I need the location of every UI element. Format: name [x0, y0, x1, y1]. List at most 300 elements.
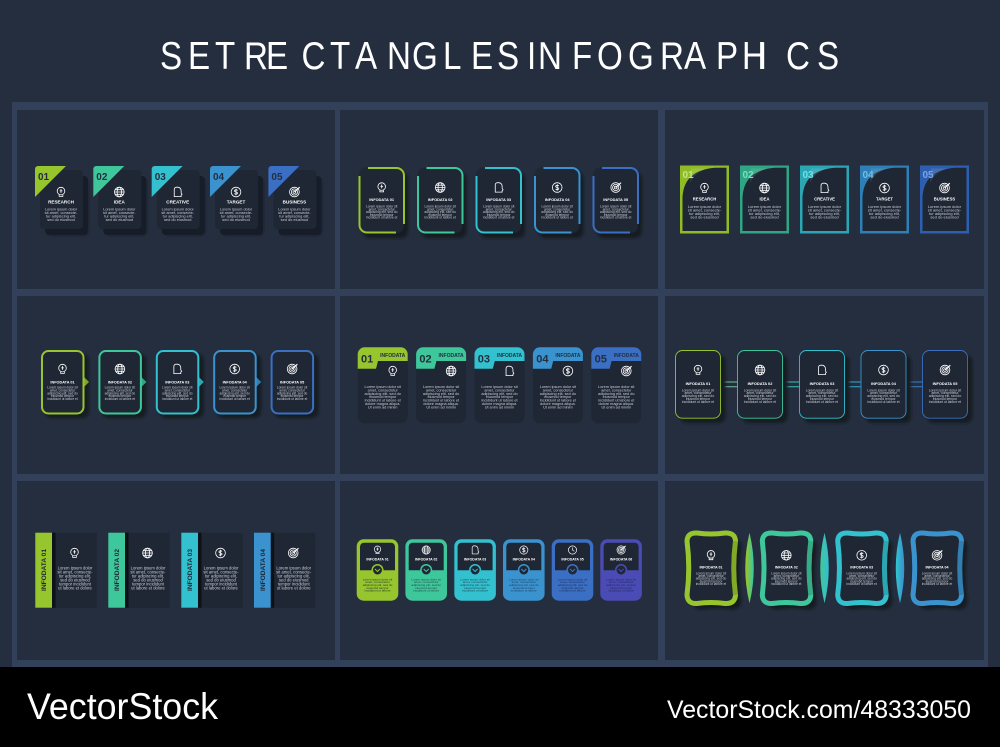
card infodata 03: eiusmod tempor: [850, 579, 874, 583]
card infodata 05: eiusmod tempor: [561, 586, 584, 590]
card infodata 02: Lorem ipsum dolor sit: [424, 204, 456, 208]
card infodata 05: amet, consectetur: [603, 207, 630, 211]
card infodata 02: sed do eiusmod: [133, 577, 163, 582]
card 04: adipiscing elit, sed do: [540, 392, 576, 396]
title: SET RECTANGLES INFOGRAPHICS: [160, 33, 839, 78]
card 03 creative: [152, 166, 205, 235]
card infodata 04: sit amet, consecte-: [276, 569, 312, 574]
card infodata 04: INFODATA 04: [260, 549, 267, 591]
card infodata 03: eiusmod tempor: [487, 213, 511, 217]
card 05 business: sed do eiusmod: [930, 215, 959, 220]
card infodata 03: amet, consectetur: [165, 388, 191, 392]
card infodata 03: eiusmod tempor: [810, 397, 835, 401]
card infodata 02: amet, consectetur: [747, 391, 774, 395]
card 02: adipiscing elit, sed do: [423, 392, 459, 396]
card infodata 05: [272, 351, 319, 418]
card infodata 05: Lorem ipsum dolor sit: [277, 386, 307, 390]
card infodata 05: INFODATA 05: [933, 381, 958, 386]
connector 4: [906, 382, 922, 387]
card 05 business: tur adipiscing elit,: [929, 211, 960, 216]
card infodata 01: INFODATA 01: [50, 380, 75, 384]
lens divider 2: [820, 533, 829, 603]
card infodata 02: sit amet, consecte-: [130, 569, 166, 574]
card 04 target: sit amet, consecte-: [868, 208, 902, 212]
card 02 idea: sed do eiusmod: [750, 215, 779, 220]
card infodata 05: Lorem ipsum dolor sit: [929, 388, 961, 392]
card 05: 05: [595, 354, 607, 366]
card infodata 04: INFODATA 04: [871, 381, 897, 386]
card infodata 04: ut labore et dolore: [277, 585, 311, 590]
footer image id: VectorStock.com/48333050: [667, 696, 971, 724]
card infodata 02: INFODATA 02: [748, 381, 773, 386]
card infodata 02: Lorem ipsum dolor: [131, 565, 166, 570]
card infodata 01: amet, consectetur: [698, 574, 725, 578]
card 01 research: Lorem ipsum dolor: [45, 206, 78, 212]
card infodata 01: adipiscing elit, sed do: [366, 210, 398, 214]
card infodata 01: amet, consectetur: [685, 391, 712, 395]
card infodata 05: INFODATA 05: [280, 380, 304, 384]
card infodata 01: amet, consectetur: [365, 580, 390, 584]
card infodata 05: adipiscing elit, sed do: [929, 394, 961, 398]
card infodata 05: Lorem ipsum dolor sit: [558, 577, 587, 581]
card 04: amet, consectetur: [543, 388, 574, 392]
card infodata 02: adipiscing elit, sed do: [411, 583, 441, 587]
card infodata 01: [42, 351, 89, 418]
card infodata 02: Lorem ipsum dolor sit: [105, 386, 135, 390]
card infodata 05: amet, consectetur: [932, 391, 959, 395]
card infodata 02: INFODATA 02: [428, 197, 453, 202]
card infodata 04: incididunt ut labore et: [220, 397, 250, 401]
card 05: incididunt ut labore et: [598, 399, 635, 403]
card infodata 05: eiusmod tempor: [604, 213, 628, 217]
card 04: dolore magna aliqua.: [540, 402, 576, 406]
card infodata 01: [35, 533, 97, 608]
panel: connected thin outline cards: [665, 296, 984, 474]
card 02 idea: sit amet, consecte-: [103, 210, 136, 215]
card infodata 03: sed do eiusmod: [206, 577, 236, 582]
card infodata 01: incididunt ut labore et: [696, 582, 726, 586]
card infodata 01: Lorem ipsum dolor sit: [363, 577, 392, 581]
card 04 target: tur adipiscing elit,: [221, 214, 251, 219]
card 04 target: sit amet, consecte-: [220, 210, 253, 215]
card infodata 06: INFODATA 06: [610, 558, 632, 562]
card 02 idea: tur adipiscing elit,: [104, 214, 134, 219]
card infodata 01: tempor incididunt: [59, 581, 92, 586]
card 03: adipiscing elit, sed do: [481, 392, 518, 396]
card infodata 03: amet, consectetur: [849, 574, 875, 578]
connector 1: [721, 382, 737, 387]
card infodata 03: Lorem ipsum dolor sit: [162, 386, 193, 390]
card infodata 04: amet, consectetur: [544, 207, 571, 211]
card infodata 04: [214, 351, 261, 418]
card infodata 01: INFODATA 01: [700, 566, 722, 570]
card infodata 02: eiusmod tempor: [748, 397, 773, 401]
card 05 business: 05: [922, 170, 934, 181]
card infodata 03: incididunt ut labore et: [162, 397, 193, 401]
card infodata 04: INFODATA 04: [513, 558, 535, 562]
card infodata 04: amet, consectetur: [512, 580, 536, 584]
card 04: eiusmod tempor: [544, 395, 572, 399]
card 03: dolore magna aliqua.: [482, 402, 517, 406]
card infodata 03: sit amet, consecte-: [203, 569, 239, 574]
card infodata 01: tur adipiscing elit,: [59, 573, 91, 578]
card infodata 02: amet, consectetur: [774, 574, 800, 578]
card infodata 03: incididunt ut labore: [462, 588, 488, 592]
card infodata 02: adipiscing elit, sed do: [105, 391, 135, 395]
card 01 research: sed do eiusmod: [690, 215, 719, 220]
card infodata 03: INFODATA 03: [810, 381, 835, 386]
card infodata 01: [687, 533, 742, 610]
panel: square frame cards with curved corner: [665, 110, 984, 289]
card infodata 04: [534, 168, 584, 238]
card infodata 06: incididunt ut labore: [608, 588, 634, 592]
card 02 idea: [93, 166, 146, 235]
card infodata 02: adipiscing elit, sed do: [744, 394, 776, 398]
card infodata 04: tempor incididunt: [278, 581, 310, 586]
card 01: eiusmod tempor: [369, 395, 397, 399]
card infodata 03: INFODATA 03: [850, 566, 873, 570]
card 03 creative: Lorem ipsum dolor: [162, 206, 195, 212]
card infodata 04: incididunt ut labore: [511, 588, 537, 592]
card 02 idea: Lorem ipsum dolor: [748, 204, 782, 209]
card infodata 03: INFODATA 03: [464, 558, 486, 562]
connector 3: [844, 382, 861, 387]
card infodata 02: incididunt ut labore et: [771, 582, 802, 586]
card 02 idea: sed do eiusmod: [106, 217, 133, 222]
card infodata 01: Lorem ipsum dolor sit: [682, 388, 714, 392]
card infodata 05: Lorem ipsum dolor sit: [600, 204, 632, 208]
card infodata 01: Lorem ipsum dolor sit: [696, 571, 726, 575]
card 03 creative: 03: [155, 172, 166, 183]
card 01: incididunt ut labore et: [365, 399, 402, 403]
card 01: INFODATA: [380, 353, 406, 359]
lens divider 3: [896, 533, 904, 603]
card infodata 04: eiusmod tempor: [871, 397, 897, 401]
card infodata 03: Lorem ipsum dolor sit: [460, 577, 490, 581]
card 02: 02: [419, 354, 432, 366]
panel: wavy outline cards with lens dividers: [665, 481, 984, 660]
card infodata 01: Lorem ipsum dolor sit: [47, 386, 78, 390]
card infodata 01: INFODATA 01: [369, 197, 395, 202]
card 03 creative: CREATIVE: [166, 200, 189, 205]
card infodata 03: [181, 533, 243, 608]
card 03 creative: sed do eiusmod: [164, 217, 191, 222]
card infodata 02: incididunt ut labore et: [744, 400, 776, 404]
card infodata 04: adipiscing elit, sed do: [509, 583, 539, 587]
card 01: [358, 347, 408, 423]
card 04 target: [210, 166, 263, 235]
card infodata 02: Lorem ipsum dolor sit: [411, 577, 441, 581]
card infodata 03: tempor incididunt: [205, 581, 238, 586]
card 03: [474, 347, 524, 423]
panel: vertical bar cards: [17, 481, 335, 660]
card infodata 04: incididunt ut labore et: [542, 216, 573, 220]
card 02 idea: 02: [96, 172, 108, 183]
card infodata 02: amet, consectetur: [414, 580, 438, 584]
card 04: Ut enim ad minim: [543, 405, 573, 409]
card infodata 05: eiusmod tempor: [933, 397, 958, 401]
card 01 research: RESEARCH: [693, 196, 716, 202]
card infodata 04: [503, 539, 545, 601]
card infodata 03: amet, consectetur: [463, 580, 487, 584]
card 01 research: 01: [38, 172, 50, 183]
card 03 creative: 03: [802, 170, 814, 181]
card 03: Lorem ipsum dolor sit: [481, 385, 519, 389]
card infodata 03: eiusmod tempor: [464, 586, 486, 590]
card infodata 03: adipiscing elit, sed do: [846, 577, 877, 581]
card infodata 04: adipiscing elit, sed do: [219, 391, 250, 395]
card infodata 02: eiusmod tempor: [775, 579, 799, 583]
card infodata 01: [676, 350, 726, 423]
card 01 research: tur adipiscing elit,: [689, 211, 720, 216]
card infodata 01: [359, 168, 408, 238]
card 03 creative: sed do eiusmod: [810, 215, 839, 220]
card infodata 04: eiusmod tempor: [545, 213, 570, 217]
card infodata 02: [762, 533, 817, 610]
card infodata 01: Lorem ipsum dolor: [58, 565, 93, 570]
card 05 business: sit amet, consecte-: [928, 208, 962, 212]
card infodata 02: eiusmod tempor: [108, 394, 132, 398]
card infodata 01: adipiscing elit, sed do: [363, 583, 393, 587]
card infodata 05: adipiscing elit, sed do: [277, 391, 308, 395]
card infodata 02: incididunt ut labore et: [105, 397, 135, 401]
card infodata 05: eiusmod tempor: [281, 394, 304, 398]
card infodata 01: eiusmod tempor: [51, 394, 75, 398]
card 04 target: [860, 166, 909, 234]
card infodata 05: incididunt ut labore et: [600, 216, 631, 220]
card infodata 01: amet, consectetur: [369, 207, 396, 211]
card 01 research: Lorem ipsum dolor: [688, 204, 722, 209]
card infodata 05: incididunt ut labore et: [277, 397, 307, 401]
card infodata 01: [357, 539, 398, 601]
card infodata 04: [254, 533, 315, 608]
card 05: Lorem ipsum dolor sit: [598, 385, 635, 389]
card infodata 06: amet, consectetur: [609, 580, 633, 584]
card 02: eiusmod tempor: [427, 395, 455, 399]
card infodata 04: Lorem ipsum dolor sit: [867, 388, 900, 392]
card 05 business: [268, 166, 321, 235]
card infodata 06: Lorem ipsum dolor sit: [606, 577, 636, 581]
card 01: Lorem ipsum dolor sit: [365, 385, 402, 389]
card 04 target: sed do eiusmod: [222, 217, 250, 222]
card 03: INFODATA: [497, 353, 522, 359]
card infodata 01: incididunt ut labore: [365, 588, 391, 592]
card infodata 02: adipiscing elit, sed do: [771, 577, 802, 581]
footer band: [0, 667, 1000, 747]
card infodata 03: [800, 350, 850, 423]
card 04 target: Lorem ipsum dolor: [220, 206, 253, 212]
card infodata 02: ut labore et dolore: [131, 585, 166, 590]
connector 2: [783, 382, 799, 387]
card 05: dolore magna aliqua.: [599, 402, 634, 406]
card infodata 04: INFODATA 04: [545, 197, 570, 202]
card infodata 04: Lorem ipsum dolor sit: [219, 386, 250, 390]
card 04 target: TARGET: [876, 196, 893, 202]
card 03 creative: tur adipiscing elit,: [163, 214, 193, 219]
card 04: INFODATA: [555, 353, 581, 359]
card 04 target: 04: [862, 170, 874, 181]
card infodata 03: [476, 168, 525, 238]
card infodata 04: amet, consectetur: [870, 391, 898, 395]
card 02 idea: tur adipiscing elit,: [749, 211, 780, 216]
card infodata 04: adipiscing elit, sed do: [541, 210, 573, 214]
card infodata 06: [600, 539, 642, 601]
card infodata 02: INFODATA 02: [775, 566, 798, 570]
card 02: Lorem ipsum dolor sit: [423, 385, 460, 389]
card 02: INFODATA: [439, 353, 464, 359]
card 05 business: [920, 166, 969, 234]
card infodata 03: Lorem ipsum dolor sit: [846, 571, 877, 575]
card infodata 02: [108, 533, 170, 608]
card 03: amet, consectetur: [484, 388, 515, 392]
panel: split outline cards: [340, 110, 658, 289]
card infodata 03: tur adipiscing elit,: [205, 573, 237, 578]
card infodata 03: amet, consectetur: [486, 207, 513, 211]
card infodata 02: incididunt ut labore: [413, 588, 439, 592]
card infodata 04: eiusmod tempor: [926, 579, 949, 583]
card infodata 02: [405, 539, 447, 601]
card 01 research: sed do eiusmod: [47, 217, 75, 222]
card 04 target: 04: [213, 172, 225, 183]
card 03 creative: sit amet, consecte-: [161, 210, 195, 215]
card infodata 02: [418, 168, 466, 238]
card 04 target: TARGET: [227, 200, 245, 205]
card infodata 03: Lorem ipsum dolor sit: [483, 204, 515, 208]
card infodata 05: incididunt ut labore et: [929, 400, 961, 404]
card infodata 02: tempor incididunt: [132, 581, 165, 586]
card infodata 02: adipiscing elit, sed do: [424, 210, 456, 214]
card infodata 06: eiusmod tempor: [610, 586, 632, 590]
card infodata 05: amet, consectetur: [560, 580, 585, 584]
card infodata 03: [157, 351, 204, 418]
card infodata 05: adipiscing elit, sed do: [600, 210, 632, 214]
card infodata 01: incididunt ut labore et: [366, 216, 397, 220]
card 01 research: sit amet, consecte-: [45, 210, 78, 215]
card infodata 03: adipiscing elit, sed do: [483, 210, 515, 214]
card infodata 01: incididunt ut labore et: [47, 397, 78, 401]
card infodata 03: INFODATA 03: [187, 549, 194, 591]
card infodata 04: amet, consectetur: [924, 574, 951, 578]
card infodata 03: adipiscing elit, sed do: [162, 391, 193, 395]
card 01: 01: [361, 354, 373, 366]
card infodata 02: INFODATA 02: [415, 558, 437, 562]
card infodata 01: INFODATA 01: [41, 549, 48, 591]
card 02 idea: 02: [742, 170, 754, 181]
card 03 creative: sit amet, consecte-: [808, 208, 842, 212]
card 02 idea: sit amet, consecte-: [748, 208, 782, 212]
card infodata 04: amet, consectetur: [222, 388, 248, 392]
card 01: Ut enim ad minim: [368, 405, 397, 409]
card infodata 01: eiusmod tempor: [370, 213, 394, 217]
card infodata 02: [738, 350, 788, 423]
card infodata 02: amet, consectetur: [427, 207, 454, 211]
footer logo text: VectorStock: [27, 686, 218, 727]
card infodata 02: Lorem ipsum dolor sit: [744, 388, 776, 392]
card 05 business: BUSINESS: [934, 196, 955, 202]
card 03 creative: CREATIVE: [814, 196, 835, 202]
card 03 creative: [800, 166, 849, 234]
card infodata 04: tur adipiscing elit,: [278, 573, 310, 578]
card infodata 04: Lorem ipsum dolor sit: [922, 571, 952, 575]
card infodata 05: amet, consectetur: [279, 388, 306, 392]
card infodata 01: INFODATA 01: [686, 381, 711, 386]
card infodata 02: eiusmod tempor: [415, 586, 437, 590]
card 04 target: sed do eiusmod: [870, 215, 899, 220]
card 05: Ut enim ad minim: [602, 405, 631, 409]
card 02: dolore magna aliqua.: [423, 402, 459, 406]
card infodata 04: adipiscing elit, sed do: [867, 394, 900, 398]
card infodata 02: amet, consectetur: [107, 388, 134, 392]
card infodata 05: incididunt ut labore: [560, 588, 586, 592]
card infodata 03: [454, 539, 496, 601]
card infodata 02: tur adipiscing elit,: [132, 573, 164, 578]
card 05: eiusmod tempor: [603, 395, 631, 399]
card 02: Ut enim ad minim: [426, 405, 456, 409]
card infodata 05: [922, 350, 972, 423]
card 05 business: sed do eiusmod: [281, 217, 308, 222]
card infodata 04: adipiscing elit, sed do: [922, 577, 952, 581]
card infodata 03: incididunt ut labore et: [483, 216, 514, 220]
card infodata 01: eiusmod tempor: [686, 397, 711, 401]
card 03: incididunt ut labore et: [481, 399, 518, 403]
card 04 target: Lorem ipsum dolor: [868, 204, 902, 209]
card 01: amet, consectetur: [368, 388, 399, 392]
card infodata 04: Lorem ipsum dolor sit: [509, 577, 539, 581]
card infodata 01: eiusmod tempor: [700, 579, 723, 583]
card infodata 02: INFODATA 02: [114, 549, 121, 591]
card infodata 03: incididunt ut labore et: [847, 582, 877, 586]
card infodata 05: [552, 539, 593, 601]
card 02: amet, consectetur: [426, 388, 457, 392]
card 05 business: tur adipiscing elit,: [279, 214, 309, 219]
card 05 business: sit amet, consecte-: [278, 210, 311, 215]
card infodata 02: INFODATA 02: [108, 380, 132, 384]
card 03 creative: tur adipiscing elit,: [809, 211, 840, 216]
lens divider 1: [745, 533, 754, 603]
card 01 research: [35, 166, 88, 235]
card infodata 04: eiusmod tempor: [223, 394, 247, 398]
card infodata 03: eiusmod tempor: [166, 394, 190, 398]
card infodata 01: ut labore et dolore: [58, 585, 93, 590]
card infodata 03: ut labore et dolore: [204, 585, 239, 590]
card infodata 03: INFODATA 03: [165, 380, 189, 384]
card infodata 02: incididunt ut labore et: [425, 216, 456, 220]
card 03: 03: [478, 354, 490, 366]
card 05: adipiscing elit, sed do: [598, 392, 634, 396]
panel: outline cards with arrows: [17, 296, 335, 474]
card 02 idea: IDEA: [759, 196, 770, 202]
panel: numbered tab cards: [17, 110, 335, 289]
card 04: [533, 347, 583, 423]
card infodata 01: amet, consectetur: [50, 388, 76, 392]
card infodata 04: INFODATA 04: [926, 566, 948, 570]
card 01 research: sit amet, consecte-: [688, 208, 722, 212]
card 02: [416, 347, 466, 423]
card infodata 03: amet, consectetur: [809, 391, 836, 395]
card infodata 03: Lorem ipsum dolor sit: [806, 388, 838, 392]
card infodata 01: INFODATA 01: [366, 558, 389, 562]
card 02 idea: Lorem ipsum dolor: [103, 206, 136, 212]
card infodata 05: INFODATA 05: [561, 558, 584, 562]
card infodata 03: INFODATA 03: [486, 197, 512, 202]
card infodata 04: eiusmod tempor: [513, 586, 535, 590]
card 05 business: Lorem ipsum dolor: [928, 204, 962, 209]
card infodata 01: adipiscing elit, sed do: [696, 577, 726, 581]
panel: header tab cards: [340, 296, 658, 474]
card infodata 04: incididunt ut labore et: [922, 582, 952, 586]
card infodata 04: Lorem ipsum dolor sit: [541, 204, 573, 208]
card 04: incididunt ut labore et: [540, 399, 577, 403]
